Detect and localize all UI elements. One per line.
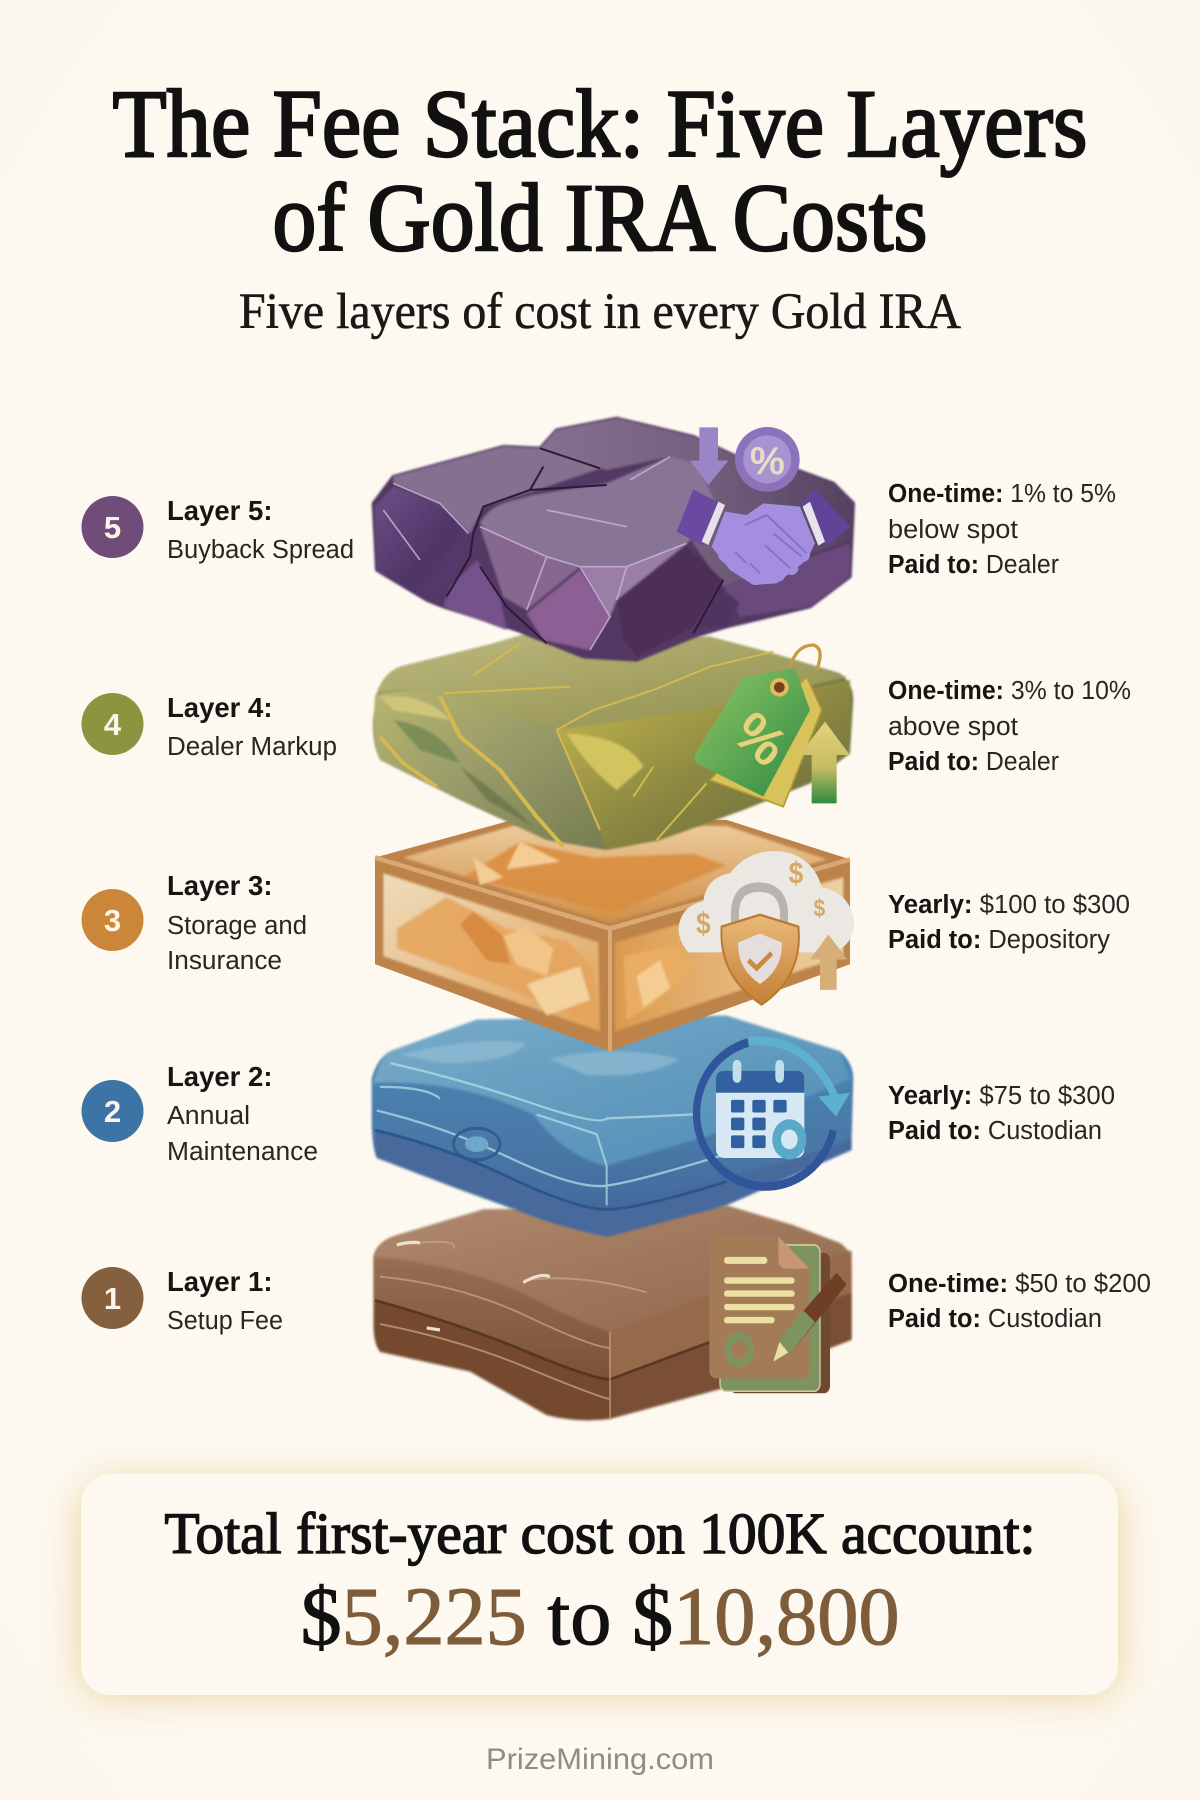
left label: layer 1: Setup Fee <box>167 1307 283 1335</box>
footer source: PrizeMining.com <box>486 1743 714 1776</box>
left label: layer 3 <box>82 870 307 975</box>
left label: layer 4 <box>82 692 337 761</box>
cost note: layer 4: Paid to: Dealer <box>888 748 1059 776</box>
left label: layer 3: Storage and <box>167 912 307 940</box>
left label: layer 1 <box>82 1266 283 1335</box>
layer 1 stone: brown wood-grain slab <box>373 1205 852 1420</box>
left label: layer 2: Layer 2: <box>167 1061 272 1092</box>
left label: layer 3: 3 <box>104 903 121 938</box>
left label: layer 4: Dealer Markup <box>167 733 337 761</box>
callout: total first-year cost: Total first-year cost on 100K account: <box>164 1501 1036 1566</box>
left label: layer 5: 5 <box>104 510 121 545</box>
left label: layer 2: 2 <box>104 1094 121 1129</box>
left label: layer 4: 4 <box>104 707 122 742</box>
layer 5 stone: cracked purple slab <box>373 418 853 660</box>
left label: layer 5 <box>82 495 354 564</box>
cost note: layer 4 <box>888 677 1131 776</box>
cost note: layer 2 <box>888 1082 1115 1145</box>
left label: layer 4: Layer 4: <box>167 692 272 723</box>
icon: cloud, padlock, shield and up arrow: $ <box>789 856 803 891</box>
title <box>112 70 1088 271</box>
cost note: layer 3: Yearly: $100 to $300 <box>888 891 1130 919</box>
cost note: layer 3: Paid to: Depository <box>888 926 1110 954</box>
cost note: layer 2: Paid to: Custodian <box>888 1117 1102 1145</box>
cost note: layer 4: One-time: 3% to 10% <box>888 677 1131 705</box>
callout: total first-year cost: $5,225 to $10,800 <box>300 1570 900 1662</box>
left label: layer 2 <box>82 1061 318 1166</box>
icon: green percent price tag with up arrow <box>694 645 850 807</box>
cost note: layer 2: Yearly: $75 to $300 <box>888 1082 1115 1110</box>
icon: calendar with renewal arrow and gear <box>697 1041 850 1186</box>
layer 2 stone: blue swirled slab <box>372 1016 853 1237</box>
layer 3 stone: amber glass box with crystals <box>375 818 850 1051</box>
left label: layer 1: 1 <box>104 1281 121 1316</box>
callout: total first-year cost <box>81 1474 1118 1695</box>
left label: layer 2: Annual <box>167 1102 250 1130</box>
cost note: layer 3 <box>888 891 1130 954</box>
icon: price-down arrow, percent coin and handshake: % <box>750 439 785 483</box>
left label: layer 1: Layer 1: <box>167 1266 272 1297</box>
cost note: layer 5: below spot <box>888 516 1018 544</box>
left label: layer 5: Buyback Spread <box>167 536 354 564</box>
layer 4 stone: green-gold veined slab <box>373 633 853 850</box>
title: The Fee Stack: Five Layers <box>112 70 1088 177</box>
left label: layer 2: Maintenance <box>167 1138 318 1166</box>
icon: cloud, padlock, shield and up arrow: $ <box>696 906 711 941</box>
cost note: layer 5: One-time: 1% to 5% <box>888 480 1116 508</box>
cost note: layer 5: Paid to: Dealer <box>888 551 1059 579</box>
left label: layer 5: Layer 5: <box>167 495 272 526</box>
icon: green percent price tag with up arrow: % <box>722 699 799 778</box>
icon: price-down arrow, percent coin and handshake <box>677 427 851 585</box>
cost note: layer 5 <box>888 480 1116 579</box>
title: of Gold IRA Costs <box>272 164 928 271</box>
left label: layer 3: Insurance <box>167 947 282 975</box>
icon: cloud, padlock, shield and up arrow: $ <box>814 893 825 921</box>
cost note: layer 1: One-time: $50 to $200 <box>888 1270 1151 1298</box>
icon: cloud, padlock, shield and up arrow <box>679 851 854 1005</box>
subtitle: Five layers of cost in every Gold IRA <box>239 284 961 340</box>
cost note: layer 1: Paid to: Custodian <box>888 1305 1102 1333</box>
left label: layer 3: Layer 3: <box>167 870 272 901</box>
cost note: layer 4: above spot <box>888 713 1018 741</box>
cost note: layer 1 <box>888 1270 1151 1333</box>
icon: contract document with gear and pen <box>709 1236 847 1393</box>
